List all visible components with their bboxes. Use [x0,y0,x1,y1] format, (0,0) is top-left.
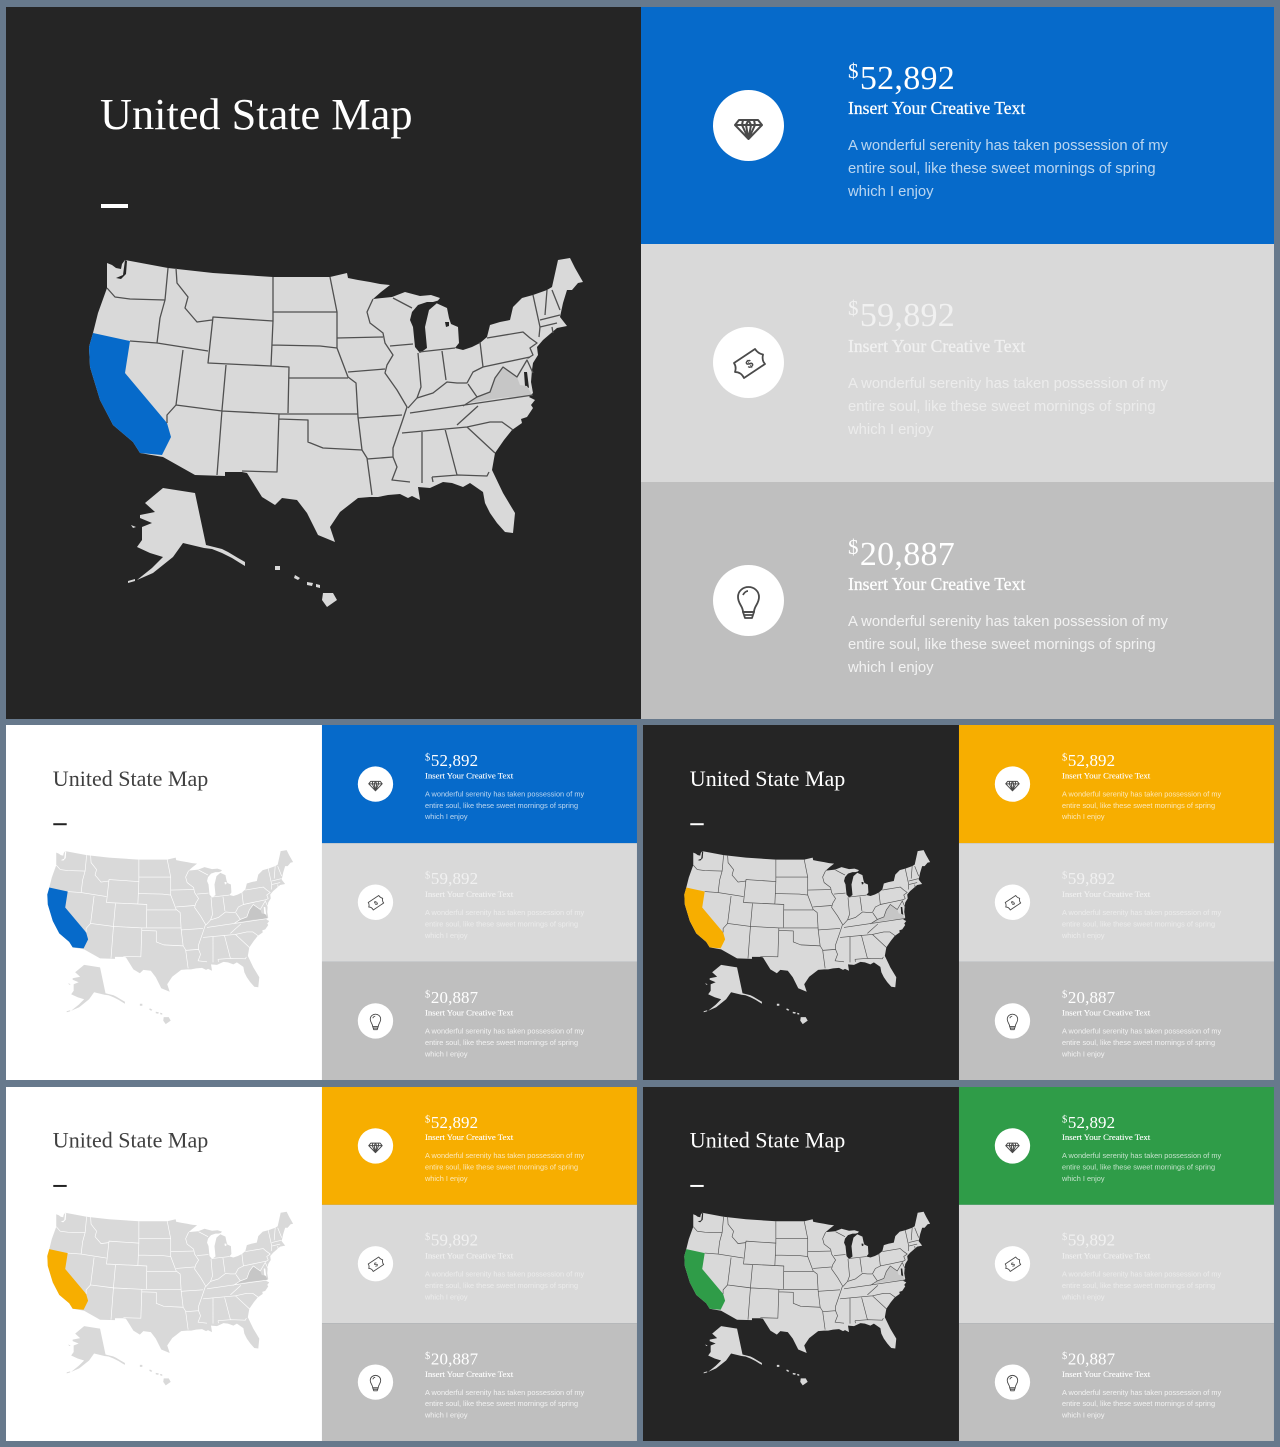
slide: main dark with blue accent [6,7,1274,719]
body text: entire soul, like these sweet mornings of spring [425,802,578,810]
icon: light bulb [713,565,784,636]
body text: A wonderful serenity has taken possession of my [848,138,1168,154]
body text [425,1270,584,1301]
heading: Insert Your Creative Text [1062,1008,1150,1018]
panel: stat 1 [322,725,637,843]
body text: which I enjoy [1062,932,1105,940]
title dash [53,823,67,825]
body text: which I enjoy [425,1293,468,1301]
title dash [53,1185,67,1187]
body text: entire soul, like these sweet mornings of spring [1062,920,1215,928]
title dash [690,1185,704,1187]
body text: entire soul, like these sweet mornings of spring [1062,1164,1215,1172]
title: United State Map [690,1128,845,1153]
icon: light bulb [358,1364,393,1400]
heading: Insert Your Creative Text [1062,1132,1150,1142]
body text: which I enjoy [1062,813,1105,821]
heading: Insert Your Creative Text [848,336,1025,356]
body text: entire soul, like these sweet mornings of spring [848,399,1156,415]
body text: entire soul, like these sweet mornings of spring [848,161,1156,177]
number: $59,892 [425,1231,478,1250]
body text: A wonderful serenity has taken possession of my [425,1152,584,1160]
icon: banknote [713,327,784,398]
panel: stat 3 [641,482,1274,719]
body text: A wonderful serenity has taken possession of my [1062,790,1221,798]
heading: Insert Your Creative Text [1062,889,1150,899]
icon: banknote [995,1246,1030,1281]
US map [47,1212,293,1386]
title dash [690,823,704,825]
slide: dark with green accent [643,1087,1274,1441]
number: $20,887 [848,535,955,573]
body text [1062,1152,1222,1183]
heading: Insert Your Creative Text [1062,1369,1150,1379]
icon: diamond [995,766,1030,802]
body text: A wonderful serenity has taken possession of my [425,1270,584,1278]
body text: entire soul, like these sweet mornings of spring [1062,1282,1215,1290]
heading: Insert Your Creative Text [425,1008,513,1018]
panel: stat 2 [959,843,1274,962]
body text: entire soul, like these sweet mornings of spring [425,920,578,928]
US map [684,1212,930,1386]
body text: A wonderful serenity has taken possession of my [425,1389,584,1397]
body text: A wonderful serenity has taken possession of my [1062,1028,1221,1036]
body text [425,1028,584,1059]
icon: diamond [358,766,393,802]
icon: diamond [995,1128,1030,1163]
body text [848,614,1168,676]
panel: stat 1 [959,1087,1274,1205]
number: $52,892 [425,751,478,770]
body text: entire soul, like these sweet mornings of spring [1062,802,1215,810]
icon: diamond [713,90,784,160]
body text: which I enjoy [1062,1412,1105,1420]
body text: which I enjoy [1062,1293,1105,1301]
number: $59,892 [1062,1231,1115,1250]
heading: Insert Your Creative Text [425,1369,513,1379]
number: $59,892 [425,869,478,888]
slide: white with yellow accent [6,1087,637,1441]
title: United State Map [690,766,845,791]
body text: which I enjoy [1062,1051,1105,1059]
panel: map [643,725,959,1080]
number: $59,892 [848,296,955,334]
body text: A wonderful serenity has taken possession of my [425,909,584,917]
icon: banknote [358,1246,393,1281]
body text: which I enjoy [425,1175,468,1183]
body text: which I enjoy [425,932,468,940]
title dash [101,204,128,208]
panel: map [6,1087,322,1441]
body text [425,1152,584,1183]
body text: A wonderful serenity has taken possession of my [1062,909,1221,917]
body text: A wonderful serenity has taken possession of my [1062,1152,1221,1160]
body text: A wonderful serenity has taken possession of my [1062,1389,1221,1397]
heading: Insert Your Creative Text [425,1251,513,1261]
heading: Insert Your Creative Text [425,889,513,899]
icon: banknote [358,885,393,920]
heading: Insert Your Creative Text [848,98,1025,118]
body text [1062,1270,1221,1301]
panel: stat 3 [322,1323,637,1441]
number: $20,887 [425,1350,478,1368]
body text: entire soul, like these sweet mornings of spring [425,1164,578,1172]
heading: Insert Your Creative Text [425,770,513,780]
panel: stat 2 [959,1205,1274,1323]
US map [684,850,930,1024]
slide: white with blue accent [6,725,637,1080]
body text: A wonderful serenity has taken possession of my [425,790,584,798]
panel: map [6,7,641,719]
number: $52,892 [425,1113,478,1132]
panel: stat 3 [959,962,1274,1080]
body text [1062,1389,1222,1420]
body text: entire soul, like these sweet mornings of spring [425,1282,578,1290]
body text: entire soul, like these sweet mornings of spring [1062,1400,1215,1408]
body text [1062,1028,1222,1059]
number: $20,887 [425,988,478,1007]
body text [425,790,584,821]
title: United State Map [53,1128,208,1153]
panel: stat 2 [641,244,1274,482]
number: $52,892 [848,59,955,97]
heading: Insert Your Creative Text [848,574,1025,594]
panel: stat 1 [959,725,1274,843]
panel: stat 1 [641,7,1274,244]
body text: A wonderful serenity has taken possession of my [425,1028,584,1036]
heading: Insert Your Creative Text [1062,770,1150,780]
slide: dark with yellow accent [643,725,1274,1080]
icon: light bulb [358,1003,393,1039]
body text [1062,909,1221,940]
icon: light bulb [995,1003,1030,1039]
body text: A wonderful serenity has taken possession of my [848,376,1168,392]
body text [1062,790,1222,821]
number: $20,887 [1062,1350,1115,1368]
panel: stat 2 [322,843,637,962]
body text: entire soul, like these sweet mornings of spring [425,1039,578,1047]
body text: which I enjoy [848,660,934,676]
body text [848,138,1168,200]
icon: diamond [358,1128,393,1163]
body text [425,1389,584,1420]
number: $52,892 [1062,1113,1115,1132]
icon: light bulb [995,1364,1030,1400]
US map [89,258,583,607]
body text: which I enjoy [425,813,468,821]
panel: stat 3 [322,962,637,1080]
body text: which I enjoy [425,1412,468,1420]
panel: stat 3 [959,1323,1274,1441]
US map [47,850,293,1024]
body text: entire soul, like these sweet mornings of spring [848,637,1156,653]
body text: which I enjoy [425,1051,468,1059]
icon: banknote [995,885,1030,920]
body text: A wonderful serenity has taken possession of my [848,614,1168,630]
heading: Insert Your Creative Text [425,1132,513,1142]
panel: stat 2 [322,1205,637,1323]
body text: entire soul, like these sweet mornings of spring [1062,1039,1215,1047]
title: United State Map [53,766,208,791]
heading: Insert Your Creative Text [1062,1251,1150,1261]
body text: which I enjoy [848,184,934,200]
number: $52,892 [1062,751,1115,770]
panel: stat 1 [322,1087,637,1205]
body text: A wonderful serenity has taken possession of my [1062,1270,1221,1278]
panel: map [643,1087,959,1441]
title: United State Map [100,90,412,139]
panel: map [6,725,322,1080]
number: $20,887 [1062,988,1115,1007]
body text [848,376,1168,438]
body text: which I enjoy [848,422,934,438]
number: $59,892 [1062,869,1115,888]
body text: which I enjoy [1062,1175,1105,1183]
body text: entire soul, like these sweet mornings of spring [425,1400,578,1408]
body text [425,909,584,940]
